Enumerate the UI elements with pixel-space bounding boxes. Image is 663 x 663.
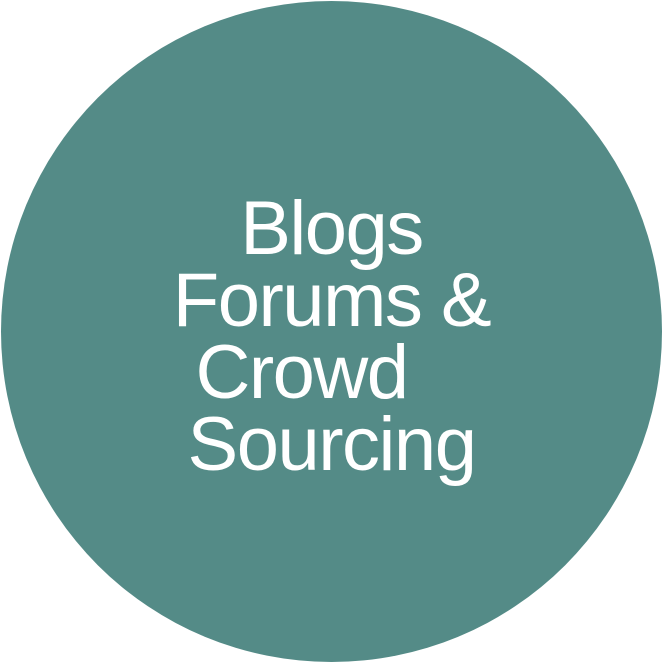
- title text: Forums &: [173, 258, 490, 343]
- title text: Blogs: [240, 186, 423, 271]
- title text: [173, 186, 490, 487]
- title text: Sourcing: [188, 402, 475, 487]
- title text: Crowd: [195, 330, 408, 415]
